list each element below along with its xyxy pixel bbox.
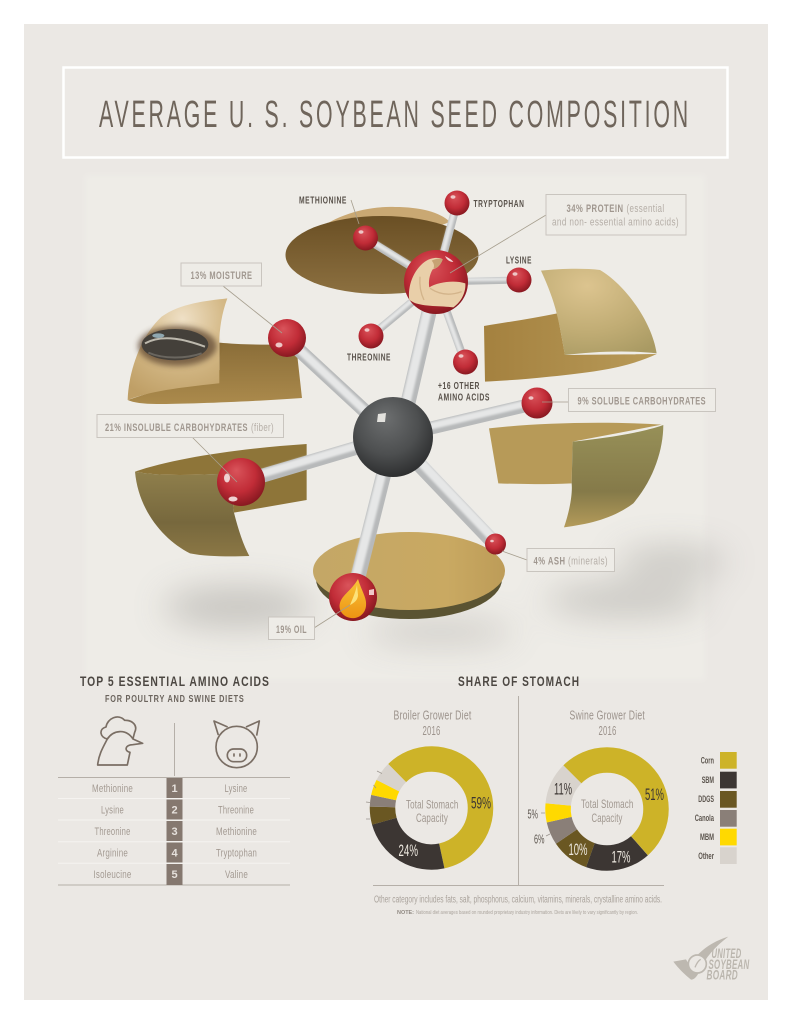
panel: share of stomach bbox=[362, 673, 737, 916]
table of amino acid rankings: Methionine bbox=[92, 783, 133, 795]
callout: insoluble carbohydrates bbox=[97, 414, 284, 438]
table of amino acid rankings bbox=[58, 778, 290, 885]
table of amino acid rankings: 3 bbox=[171, 826, 178, 838]
donut chart: broiler: 59% bbox=[471, 794, 491, 812]
sphere: lysine bbox=[506, 268, 532, 292]
callout: oil: 19% OIL bbox=[276, 624, 307, 636]
callout: ash bbox=[527, 548, 614, 572]
donut chart: broiler: 24% bbox=[398, 842, 418, 860]
label: lysine: LYSINE bbox=[506, 254, 532, 266]
swine diet heading: 2016 bbox=[598, 724, 616, 738]
sphere: tryptophan bbox=[444, 190, 470, 216]
sphere: threonine bbox=[358, 324, 384, 348]
connector rods bbox=[241, 203, 537, 597]
title bbox=[64, 68, 728, 158]
table of amino acid rankings: 5 bbox=[171, 869, 178, 881]
sphere: insoluble carbohydrates bbox=[217, 458, 265, 506]
callout: insoluble carbohydrates: (fiber) bbox=[251, 422, 274, 434]
swine diet heading bbox=[570, 708, 645, 738]
logo: united soybean board: SOYBEAN bbox=[708, 957, 750, 972]
label: threonine: THREONINE bbox=[347, 352, 391, 364]
table of amino acid rankings: Lysine bbox=[224, 783, 248, 795]
callout: insoluble carbohydrates: 21% INSOLUBLE CARBOHYDRATES bbox=[105, 422, 248, 434]
footnote: note: NOTE: bbox=[397, 910, 414, 916]
sphere: other amino acids bbox=[453, 350, 478, 374]
table of amino acid rankings: 4 bbox=[171, 848, 178, 860]
sphere: moisture bbox=[268, 319, 306, 357]
sphere: ash bbox=[485, 534, 506, 554]
shell: lower left bbox=[135, 444, 307, 556]
legend: MBM bbox=[700, 832, 714, 843]
subheading: FOR POULTRY AND SWINE DIETS bbox=[105, 693, 244, 705]
donut chart: swine: 17% bbox=[612, 848, 631, 866]
shell: upper right bbox=[484, 269, 657, 382]
shell: upper left with seed bbox=[128, 298, 302, 404]
table of amino acid rankings: 2 bbox=[171, 804, 178, 816]
illustration backdrop bbox=[85, 175, 705, 680]
donut chart: swine: 6% bbox=[534, 832, 544, 846]
callout: oil bbox=[268, 617, 314, 640]
donut chart: broiler bbox=[362, 739, 501, 877]
shell: bottom bowl bbox=[313, 532, 505, 619]
sphere: protein with muscle arm bbox=[404, 250, 468, 314]
legend: Corn bbox=[701, 756, 714, 766]
logo: united soybean board: BOARD bbox=[706, 968, 738, 982]
sphere: methionine bbox=[353, 226, 378, 250]
sphere: soluble carbohydrates bbox=[522, 388, 552, 418]
donut chart: swine bbox=[528, 740, 676, 878]
label: other amino acids bbox=[438, 380, 490, 404]
donut chart: swine: 51% bbox=[645, 786, 664, 804]
icon: pig bbox=[214, 721, 259, 768]
swine diet heading: Swine Grower Diet bbox=[570, 708, 645, 722]
callout: protein: and non- essential amino acids) bbox=[552, 216, 679, 228]
heading: SHARE OF STOMACH bbox=[458, 673, 580, 689]
broiler diet heading: Broiler Grower Diet bbox=[394, 708, 472, 722]
label: methionine: METHIONINE bbox=[299, 194, 347, 206]
shell: lower right bbox=[489, 423, 663, 527]
callout: moisture bbox=[181, 263, 262, 286]
label: tryptophan: TRYPTOPHAN bbox=[474, 198, 524, 210]
callout: protein: 34% PROTEIN bbox=[566, 203, 624, 215]
shell: top bbox=[286, 207, 478, 294]
callout: soluble carbohydrates: 9% SOLUBLE CARBOHYDRATES bbox=[578, 396, 706, 408]
table of amino acid rankings: Arginine bbox=[97, 848, 128, 860]
donut chart: broiler: Capacity bbox=[416, 811, 448, 825]
donut chart: swine: Capacity bbox=[592, 811, 622, 825]
donut chart: swine: 11% bbox=[554, 780, 572, 798]
donut chart: swine: 10% bbox=[568, 841, 588, 859]
legend: Canola bbox=[695, 813, 714, 824]
donut chart: swine: 5% bbox=[528, 808, 538, 822]
label: other amino acids: +16 OTHER bbox=[438, 380, 480, 392]
cast shadows bbox=[163, 548, 727, 642]
table of amino acid rankings: Threonine bbox=[218, 804, 254, 816]
footnote: note: National diet averages based on rounded proprietary industry information. Diets are likely to vary significantly by region. bbox=[416, 910, 638, 916]
callout: moisture: 13% MOISTURE bbox=[190, 270, 252, 282]
heading: TOP 5 ESSENTIAL AMINO ACIDS bbox=[80, 673, 270, 689]
seed with scorched halo bbox=[138, 326, 217, 366]
callout: soluble carbohydrates bbox=[568, 388, 716, 412]
callout: ash: 4% ASH bbox=[534, 556, 566, 568]
table of amino acid rankings: Methionine bbox=[216, 826, 257, 838]
logo: united soybean board bbox=[673, 937, 750, 982]
legend bbox=[695, 752, 737, 864]
table of amino acid rankings: Isoleucine bbox=[94, 869, 132, 881]
table of amino acid rankings: Tryptophan bbox=[216, 848, 257, 860]
broiler diet heading: 2016 bbox=[422, 724, 440, 738]
donut chart: swine: Total Stomach bbox=[581, 797, 634, 811]
label: other amino acids: AMINO ACIDS bbox=[438, 392, 490, 404]
soybean molecule illustration bbox=[128, 190, 727, 642]
table of amino acid rankings: Valine bbox=[225, 869, 248, 881]
callout: protein: (essential bbox=[626, 203, 664, 215]
sphere: oil with drop bbox=[329, 573, 377, 621]
legend: Other bbox=[698, 851, 714, 862]
hub sphere bbox=[353, 397, 433, 477]
callout: protein bbox=[546, 194, 686, 235]
broiler diet heading bbox=[394, 708, 472, 738]
callout: ash: (minerals) bbox=[568, 556, 608, 568]
logo: united soybean board: UNITED bbox=[712, 946, 742, 961]
legend: SBM bbox=[702, 775, 714, 786]
table of amino acid rankings: 1 bbox=[171, 783, 178, 795]
legend: DDGS bbox=[698, 794, 714, 805]
panel: top 5 essential amino acids bbox=[58, 673, 290, 885]
table of amino acid rankings: Threonine bbox=[94, 826, 130, 838]
table of amino acid rankings: Lysine bbox=[101, 804, 124, 816]
donut chart: broiler: Total Stomach bbox=[406, 798, 458, 812]
icon: rooster bbox=[98, 717, 143, 765]
